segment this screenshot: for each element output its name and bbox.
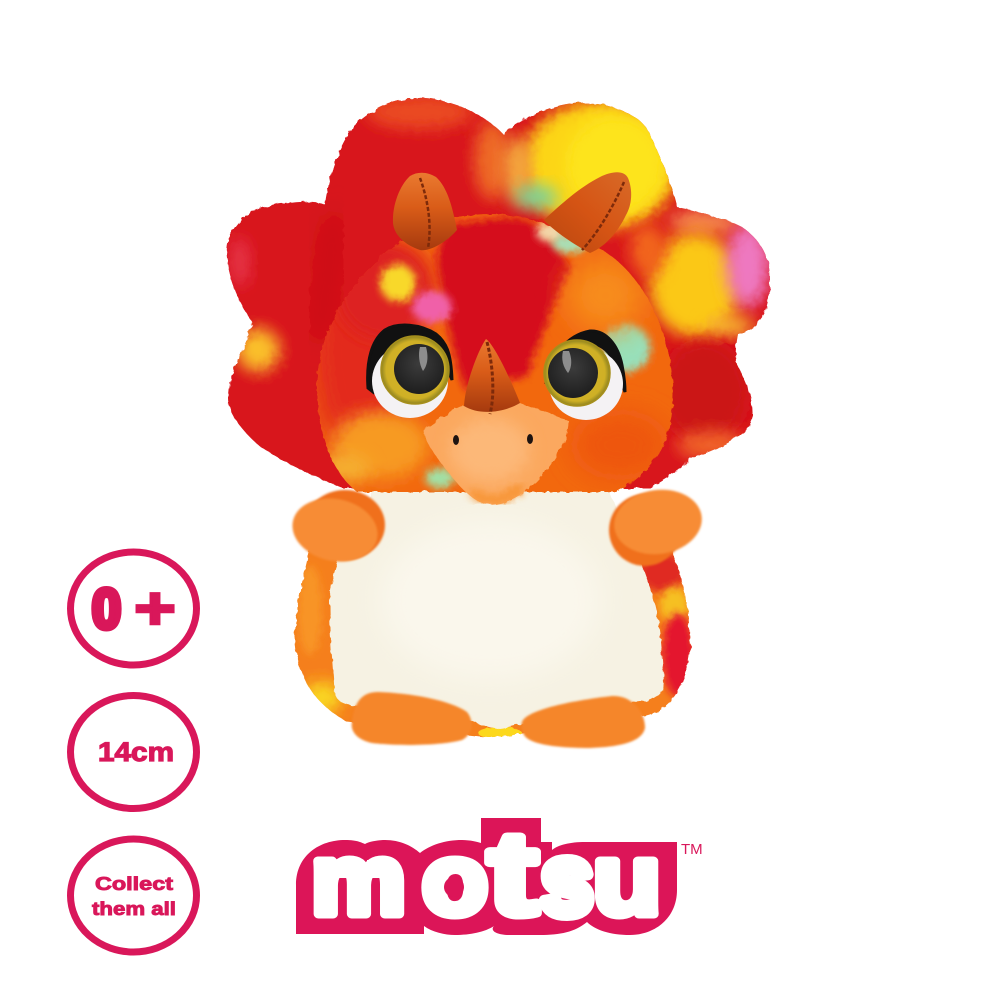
right horn bbox=[544, 172, 631, 253]
logo: motsu bbox=[296, 808, 703, 940]
right arm bbox=[609, 484, 706, 566]
nostrils bbox=[453, 434, 533, 445]
left foot bbox=[352, 692, 472, 745]
white belly bbox=[330, 488, 664, 729]
logo o counter bbox=[444, 877, 464, 897]
arm shadow bbox=[305, 490, 385, 560]
left eye bbox=[368, 325, 452, 418]
logo letters: o bbox=[422, 824, 488, 936]
left horn bbox=[393, 173, 457, 250]
crest frill bbox=[226, 97, 771, 490]
badge: size 14cm: 14cm bbox=[98, 737, 174, 767]
logo letters bbox=[311, 808, 661, 940]
badge: collect them all: Collect bbox=[95, 874, 173, 894]
logo backing shape bbox=[296, 818, 677, 935]
nose horn bbox=[464, 339, 520, 414]
badge: size 14cm bbox=[70, 696, 196, 808]
lashes bbox=[368, 325, 452, 392]
badge: age 0+: 0 bbox=[92, 577, 121, 640]
logo m fill bbox=[334, 860, 387, 878]
head bbox=[316, 214, 674, 493]
left arm bbox=[286, 490, 385, 569]
right foot bbox=[522, 696, 645, 748]
logo letters: s bbox=[541, 824, 593, 936]
belly fur shading bbox=[380, 520, 600, 680]
badge: collect them all: them all bbox=[92, 899, 176, 919]
logo letters: m bbox=[311, 824, 406, 936]
beak bbox=[423, 400, 569, 505]
badge: collect them all bbox=[70, 839, 196, 952]
badge: age 0+: + bbox=[134, 575, 176, 642]
arm shadow bbox=[609, 494, 681, 566]
plush toy: triceratops motsu bbox=[226, 97, 771, 750]
body bbox=[294, 490, 692, 738]
lashes bbox=[546, 331, 625, 392]
logo letters: u bbox=[593, 824, 661, 936]
badge: age 0+ bbox=[70, 552, 196, 665]
right eye bbox=[544, 331, 625, 420]
trademark: TM bbox=[681, 841, 703, 858]
horns bbox=[393, 172, 631, 253]
logo letters: t bbox=[488, 808, 538, 940]
